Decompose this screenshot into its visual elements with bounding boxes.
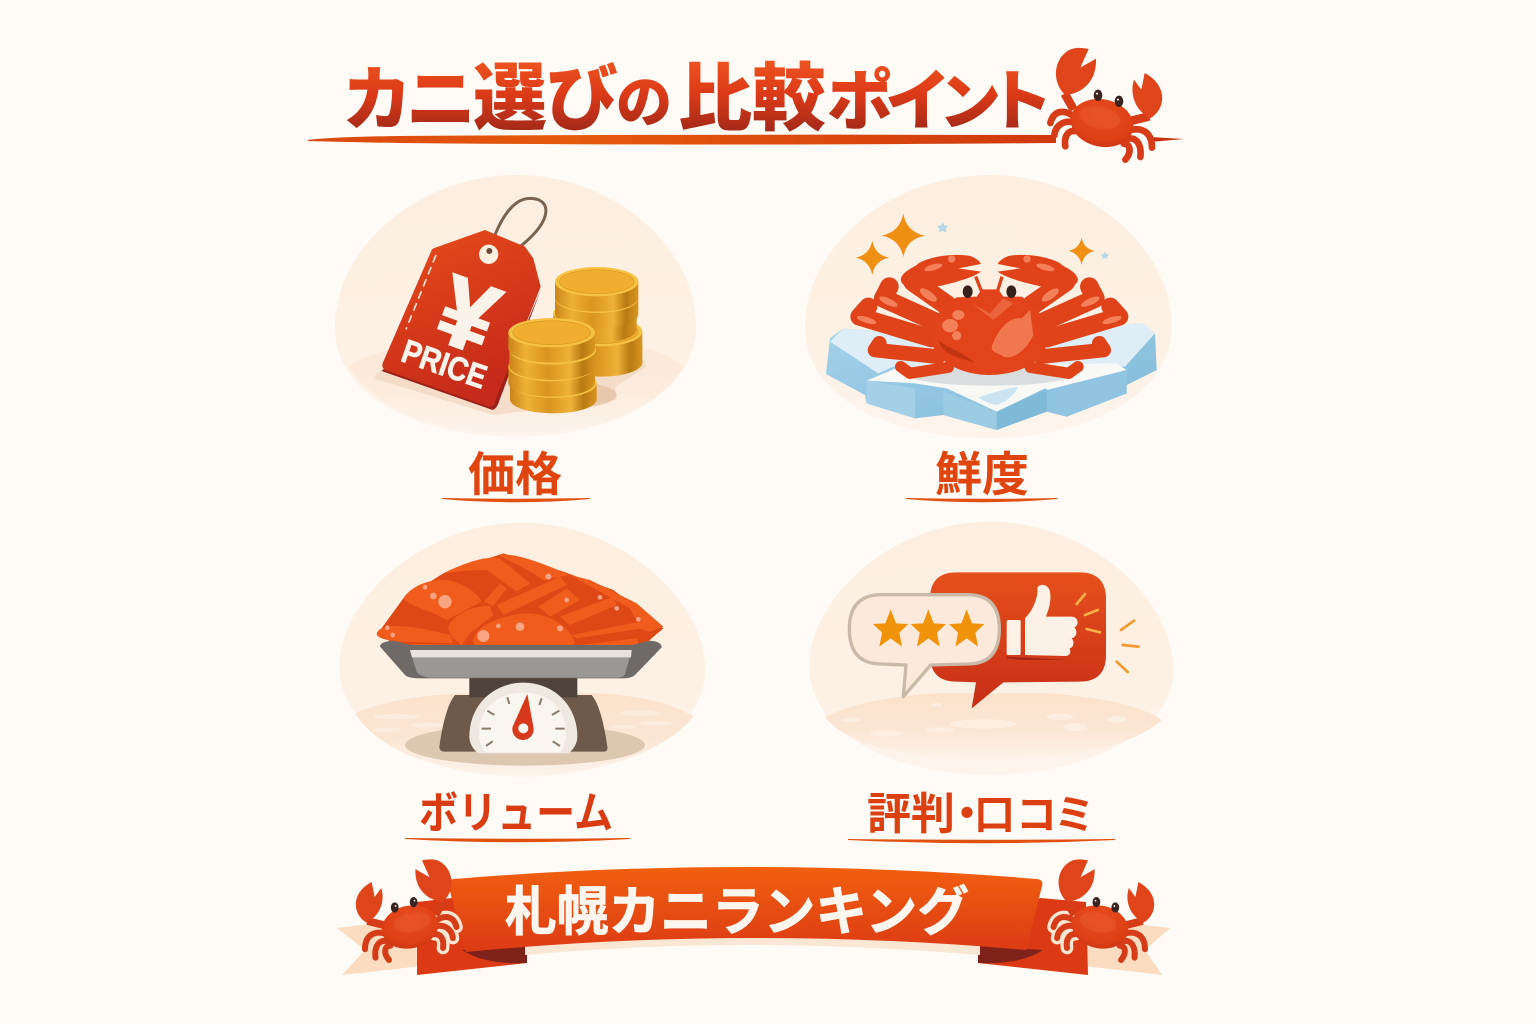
label: reputation: 評 — [867, 778, 911, 842]
back coin stack — [553, 267, 642, 377]
title text: び — [546, 40, 618, 145]
icon: left crab — [356, 859, 456, 960]
label underline — [848, 840, 1115, 843]
panel: volume — [339, 523, 705, 842]
crab right side — [998, 255, 1122, 373]
sand texture — [840, 703, 1126, 736]
dial — [469, 683, 577, 753]
background blob — [809, 522, 1173, 775]
background blob — [805, 175, 1172, 438]
panel: reputation — [809, 522, 1173, 843]
banner shadow — [525, 935, 980, 955]
title text: の — [616, 58, 672, 139]
title text: ニ — [406, 44, 476, 145]
shell highlights — [942, 298, 1033, 357]
label: reputation: ・ — [945, 778, 989, 842]
right ribbon fold — [978, 898, 1088, 975]
icon: thumbs up — [1007, 585, 1078, 660]
icon: right crab — [1054, 859, 1154, 960]
tray — [380, 641, 662, 678]
title text: イ — [885, 48, 951, 144]
yen symbol: ¥ — [423, 254, 512, 376]
title underline — [308, 135, 1184, 144]
price tag — [382, 230, 541, 410]
scale shadow — [405, 724, 645, 766]
rays outside bubble — [1117, 621, 1139, 672]
icon: title crab — [1050, 48, 1162, 160]
scale stem — [469, 677, 577, 697]
pale stars — [937, 222, 1109, 259]
crab shadow — [907, 362, 1073, 386]
crab body — [931, 289, 1048, 375]
sand texture — [372, 711, 673, 732]
label underline — [906, 498, 1057, 502]
left outer ribbon — [337, 917, 430, 975]
sparkles — [856, 213, 1095, 275]
right outer ribbon — [1075, 917, 1170, 975]
label underline — [405, 838, 630, 842]
crab pile — [377, 553, 663, 651]
main banner — [448, 867, 1042, 952]
freshness illustration — [805, 175, 1172, 438]
background blob — [335, 175, 696, 437]
title with underline and crab — [308, 39, 1184, 160]
label: reputation: ミ — [1054, 781, 1095, 841]
crab left side — [856, 255, 981, 373]
fold shadows — [462, 946, 1043, 963]
left ribbon fold — [417, 898, 527, 975]
label: reputation: コ — [1016, 781, 1057, 841]
eyes — [963, 285, 973, 298]
price illustration — [335, 175, 696, 437]
label: reputation: 口 — [974, 781, 1015, 841]
label: volume: ボリューム — [419, 777, 613, 841]
ice block — [826, 323, 1157, 430]
snow crab — [856, 255, 1122, 375]
eye stalks — [976, 277, 1002, 292]
banner text: 札幌カニランキング — [505, 870, 969, 946]
price tag string — [489, 198, 546, 253]
title text: カ — [342, 44, 412, 145]
volume illustration — [339, 523, 705, 777]
sand ground — [355, 693, 693, 775]
stars — [873, 609, 984, 647]
title text: ポ — [827, 48, 893, 144]
title text: 較 — [752, 39, 826, 146]
label: reputation: 判 — [911, 778, 955, 842]
shadows — [373, 353, 647, 415]
scale base — [439, 695, 607, 752]
label: freshness: 鮮度 — [935, 436, 1029, 505]
coins shadow — [530, 382, 617, 408]
title text: ト — [987, 48, 1053, 144]
front coin stack — [508, 318, 597, 413]
panel: freshness — [805, 175, 1172, 505]
background blob — [339, 523, 705, 777]
rays inside bubble — [1077, 594, 1100, 632]
title text: 比 — [678, 39, 752, 146]
panel: price — [335, 175, 696, 505]
label: price: 価格 — [468, 436, 562, 505]
banner: Sapporo crab ranking — [337, 859, 1170, 975]
sand ground — [825, 693, 1162, 760]
review bubble — [849, 595, 999, 697]
title text: ン — [939, 52, 1001, 142]
reputation illustration — [809, 522, 1173, 775]
price word: PRICE — [397, 333, 491, 397]
title text: 選 — [473, 39, 547, 146]
ground — [348, 340, 683, 435]
red bubble — [930, 572, 1106, 708]
label underline — [442, 498, 590, 502]
